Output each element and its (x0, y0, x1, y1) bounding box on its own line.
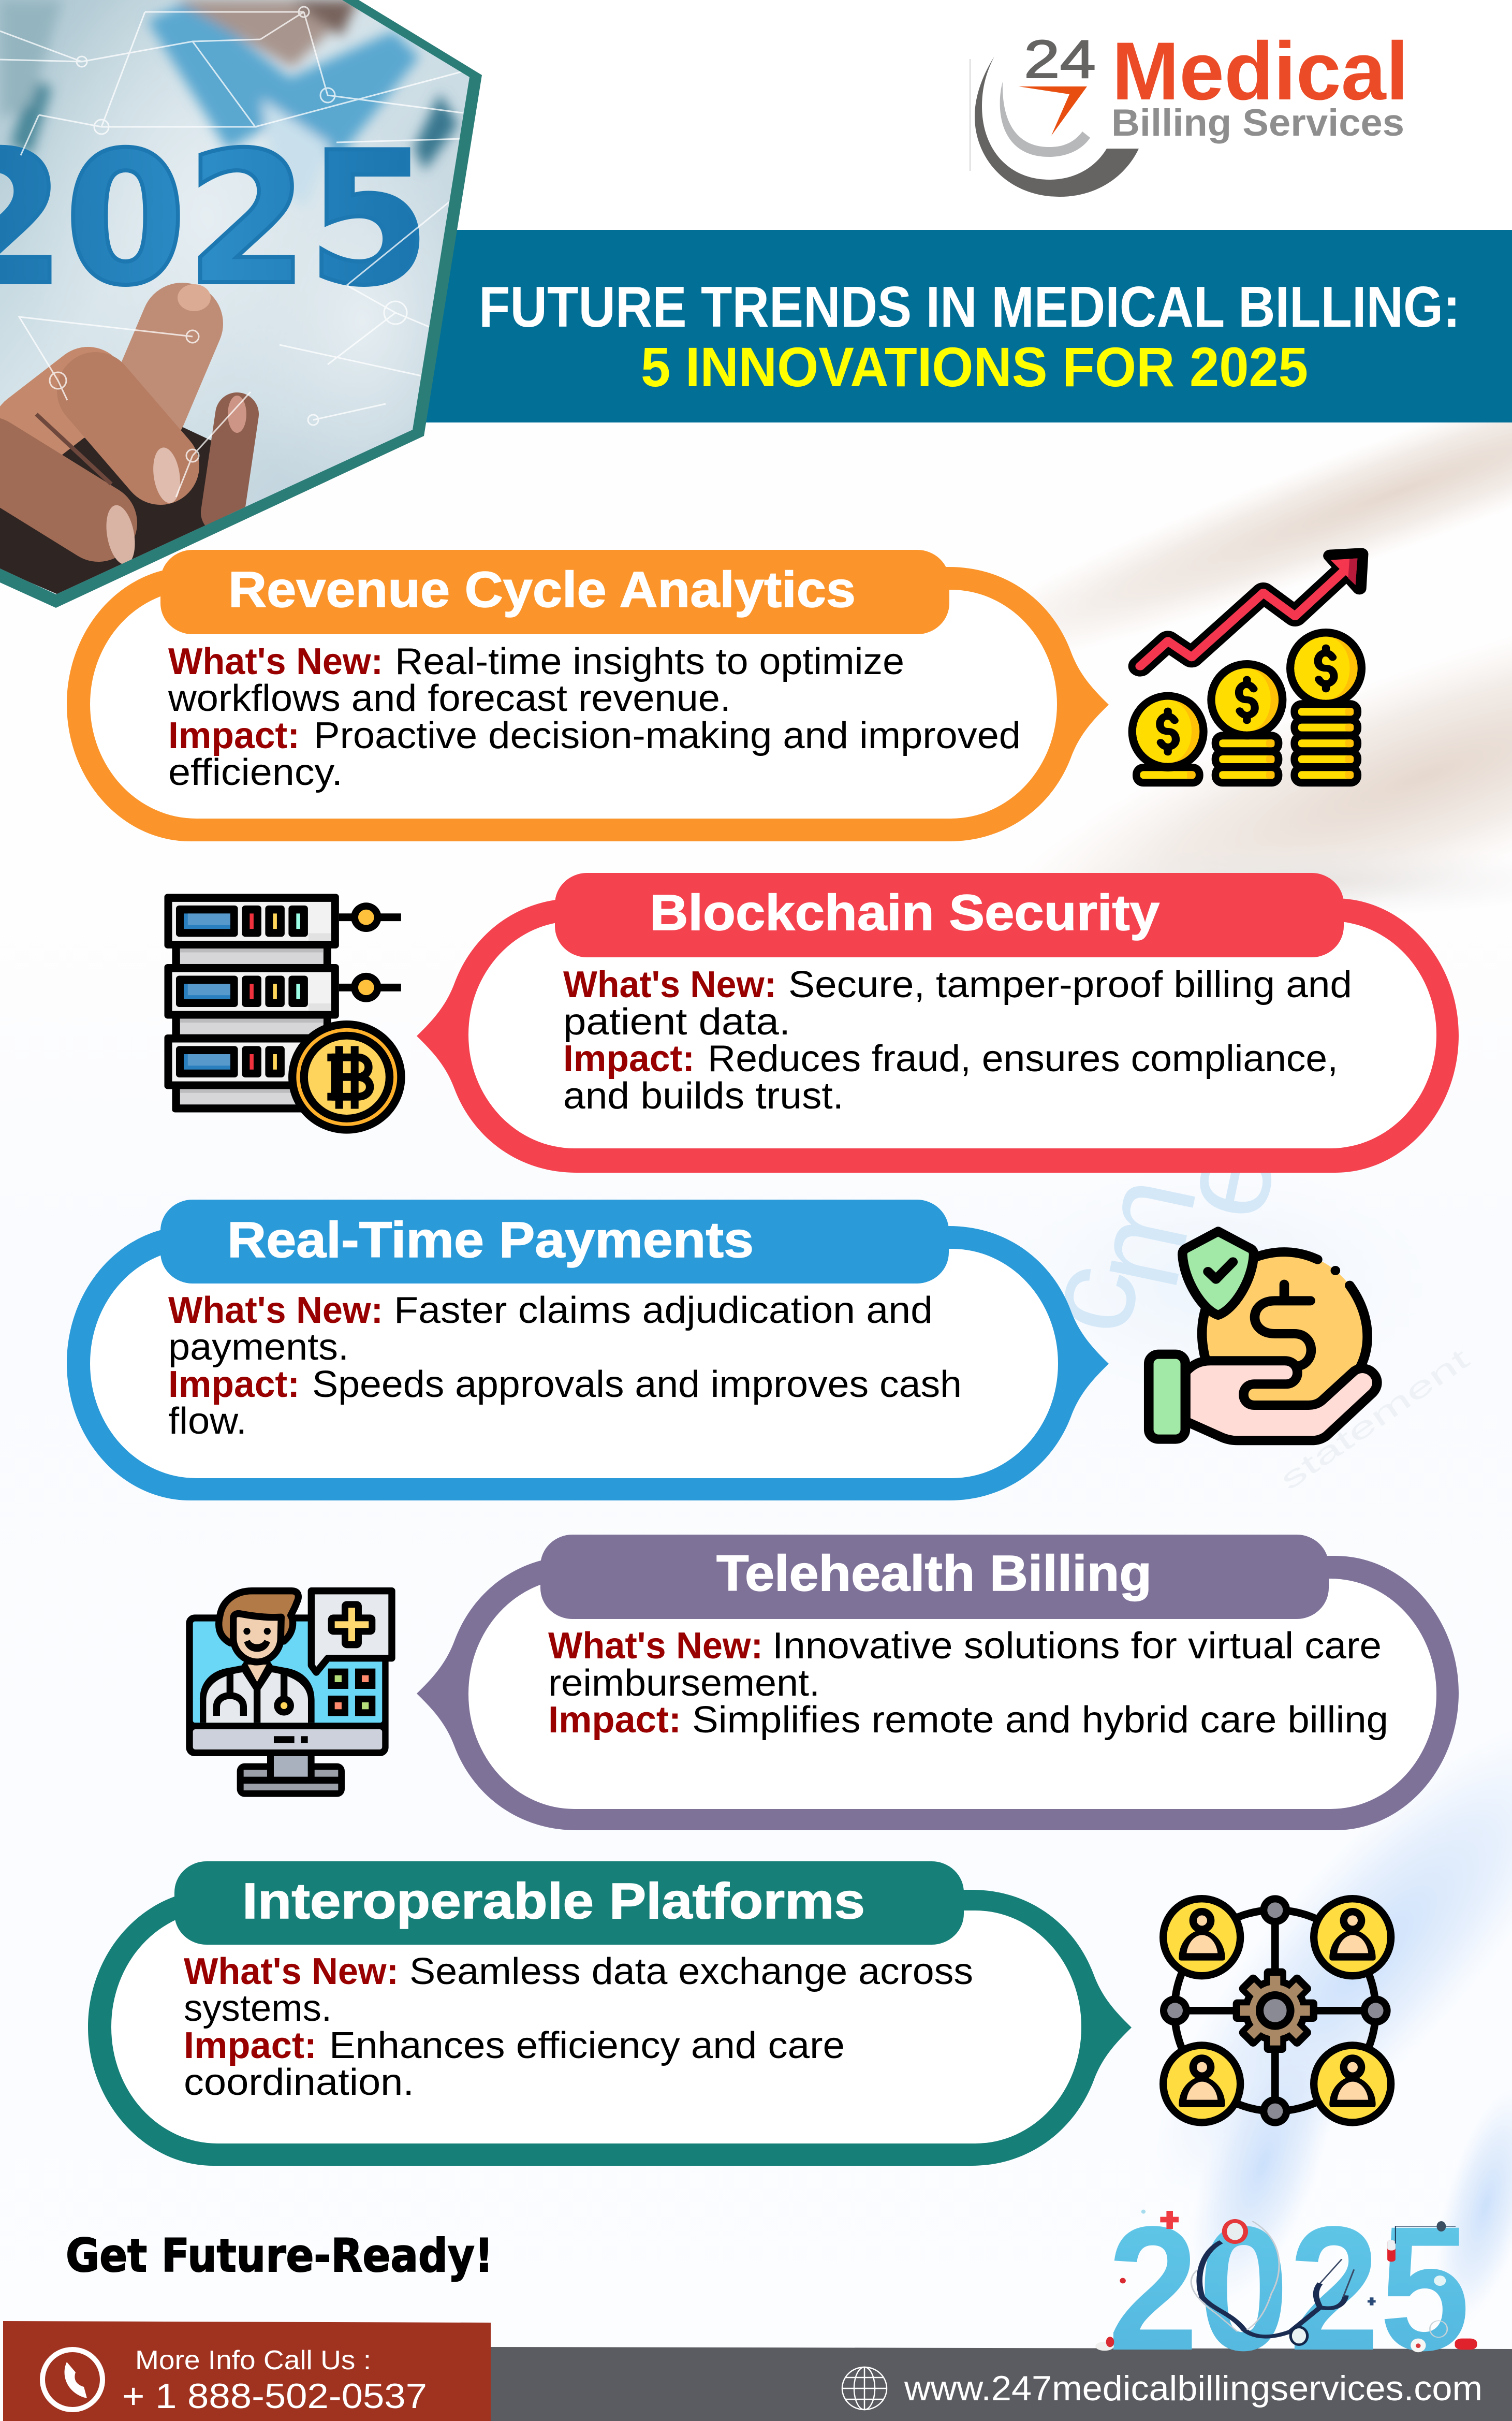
panel: Blockchain Security: What's New: (563, 964, 776, 1005)
hexagon photo (0, 0, 497, 611)
background wash: statement watermark: m (1060, 1164, 1224, 1300)
background wash: statement watermark: c (1012, 1251, 1167, 1345)
panel: Revenue Cycle Analytics: workflows and forecast revenue. (168, 678, 731, 719)
panel: Revenue Cycle Analytics (67, 550, 1109, 841)
panel: Real-Time Payments: Impact: (168, 1364, 300, 1405)
panel: Revenue Cycle Analytics: Proactive decision-making and improved (314, 715, 1021, 756)
panel: Interoperable Platforms: Interoperable Platforms (242, 1873, 865, 1929)
background wash: statement watermark: statement (1274, 1341, 1475, 1496)
footer bar (487, 2347, 1512, 2421)
contact box: + 1 888-502-0537 (122, 2376, 427, 2416)
panel: Telehealth Billing: Innovative solutions for virtual care (772, 1625, 1382, 1667)
icon: hand holding coin with shield (1149, 1231, 1377, 1440)
panel: Real-Time Payments: What's New: (168, 1290, 383, 1331)
icon: phone (42, 2350, 102, 2410)
header band (404, 230, 1512, 422)
section three (67, 1200, 1382, 1500)
panel: Real-Time Payments: Speeds approvals and improves cash (312, 1364, 962, 1405)
panel: Revenue Cycle Analytics: Impact: (168, 715, 300, 756)
logo: Medical (1112, 25, 1408, 117)
logo (970, 25, 1408, 197)
icon: servers with bitcoin (164, 894, 405, 1134)
section two (164, 873, 1459, 1173)
background wash: beige streaks (1037, 422, 1512, 903)
background wash: statement watermark: e (1147, 1130, 1303, 1230)
panel: Interoperable Platforms: systems. (184, 1988, 332, 2029)
logo: Billing Services (1111, 102, 1404, 144)
icon: telehealth doctor on monitor (186, 1591, 392, 1797)
panel: Interoperable Platforms: Enhances efficiency and care (329, 2025, 845, 2066)
footer section (3, 2190, 1512, 2421)
panel: Blockchain Security (417, 873, 1459, 1173)
icon: connected network with gear (1159, 1895, 1394, 2126)
illustration: 2025 with stethoscope: 2025 (1108, 2190, 1470, 2387)
panel: Blockchain Security: and builds trust. (563, 1075, 844, 1117)
panel: Telehealth Billing (417, 1535, 1459, 1830)
panel: Interoperable Platforms: coordination. (184, 2062, 414, 2103)
panel: Telehealth Billing: Impact: (548, 1699, 681, 1741)
contact box (3, 2321, 491, 2421)
panel: Blockchain Security: Blockchain Security (650, 884, 1159, 941)
panel: Revenue Cycle Analytics: Real-time insights to optimize (395, 641, 904, 682)
top section (0, 0, 1512, 841)
icon: globe (842, 2367, 887, 2410)
panel: Real-Time Payments: Real-Time Payments (227, 1212, 754, 1268)
heading: Get Future-Ready: Get Future-Ready! (66, 2229, 493, 2282)
panel: Interoperable Platforms: What's New: (184, 1951, 399, 1992)
title: 5 INNOVATIONS FOR 2025 (641, 336, 1308, 398)
panel: Interoperable Platforms: Impact: (184, 2025, 317, 2066)
contact box: More Info Call Us : (135, 2345, 371, 2375)
panel: Revenue Cycle Analytics: What's New: (168, 641, 383, 682)
panel: Real-Time Payments (67, 1200, 1109, 1500)
background wash: blue streaks (1192, 1773, 1512, 2301)
panel: Revenue Cycle Analytics: efficiency. (168, 752, 343, 793)
icon: coins and growth arrow (1128, 554, 1366, 786)
website: www.247medicalbillingservices.com (904, 2369, 1482, 2408)
panel: Real-Time Payments: Faster claims adjudication and (394, 1290, 933, 1331)
panel: Blockchain Security: patient data. (563, 1001, 790, 1043)
panel: Blockchain Security: Reduces fraud, ensures compliance, (708, 1038, 1338, 1080)
title (479, 275, 1460, 398)
logo: 24 (1024, 30, 1096, 90)
panel: Telehealth Billing: Telehealth Billing (716, 1545, 1152, 1601)
panel: Interoperable Platforms: Seamless data exchange across (409, 1951, 973, 1992)
panel: Blockchain Security: Secure, tamper-proof billing and (788, 964, 1352, 1005)
panel: Real-Time Payments: payments. (168, 1326, 349, 1368)
panel: Blockchain Security: Impact: (563, 1038, 695, 1080)
panel: Revenue Cycle Analytics: Revenue Cycle Analytics (228, 561, 856, 618)
panel: Telehealth Billing: Simplifies remote and hybrid care billing (692, 1699, 1388, 1741)
panel: Interoperable Platforms (88, 1861, 1132, 2166)
section four (186, 1535, 1459, 1830)
panel: Telehealth Billing: reimbursement. (548, 1662, 820, 1704)
background wash: statement watermark (1012, 1130, 1475, 1496)
section five (88, 1861, 1394, 2166)
panel: Real-Time Payments: flow. (168, 1401, 247, 1442)
panel: Telehealth Billing: What's New: (548, 1625, 763, 1667)
